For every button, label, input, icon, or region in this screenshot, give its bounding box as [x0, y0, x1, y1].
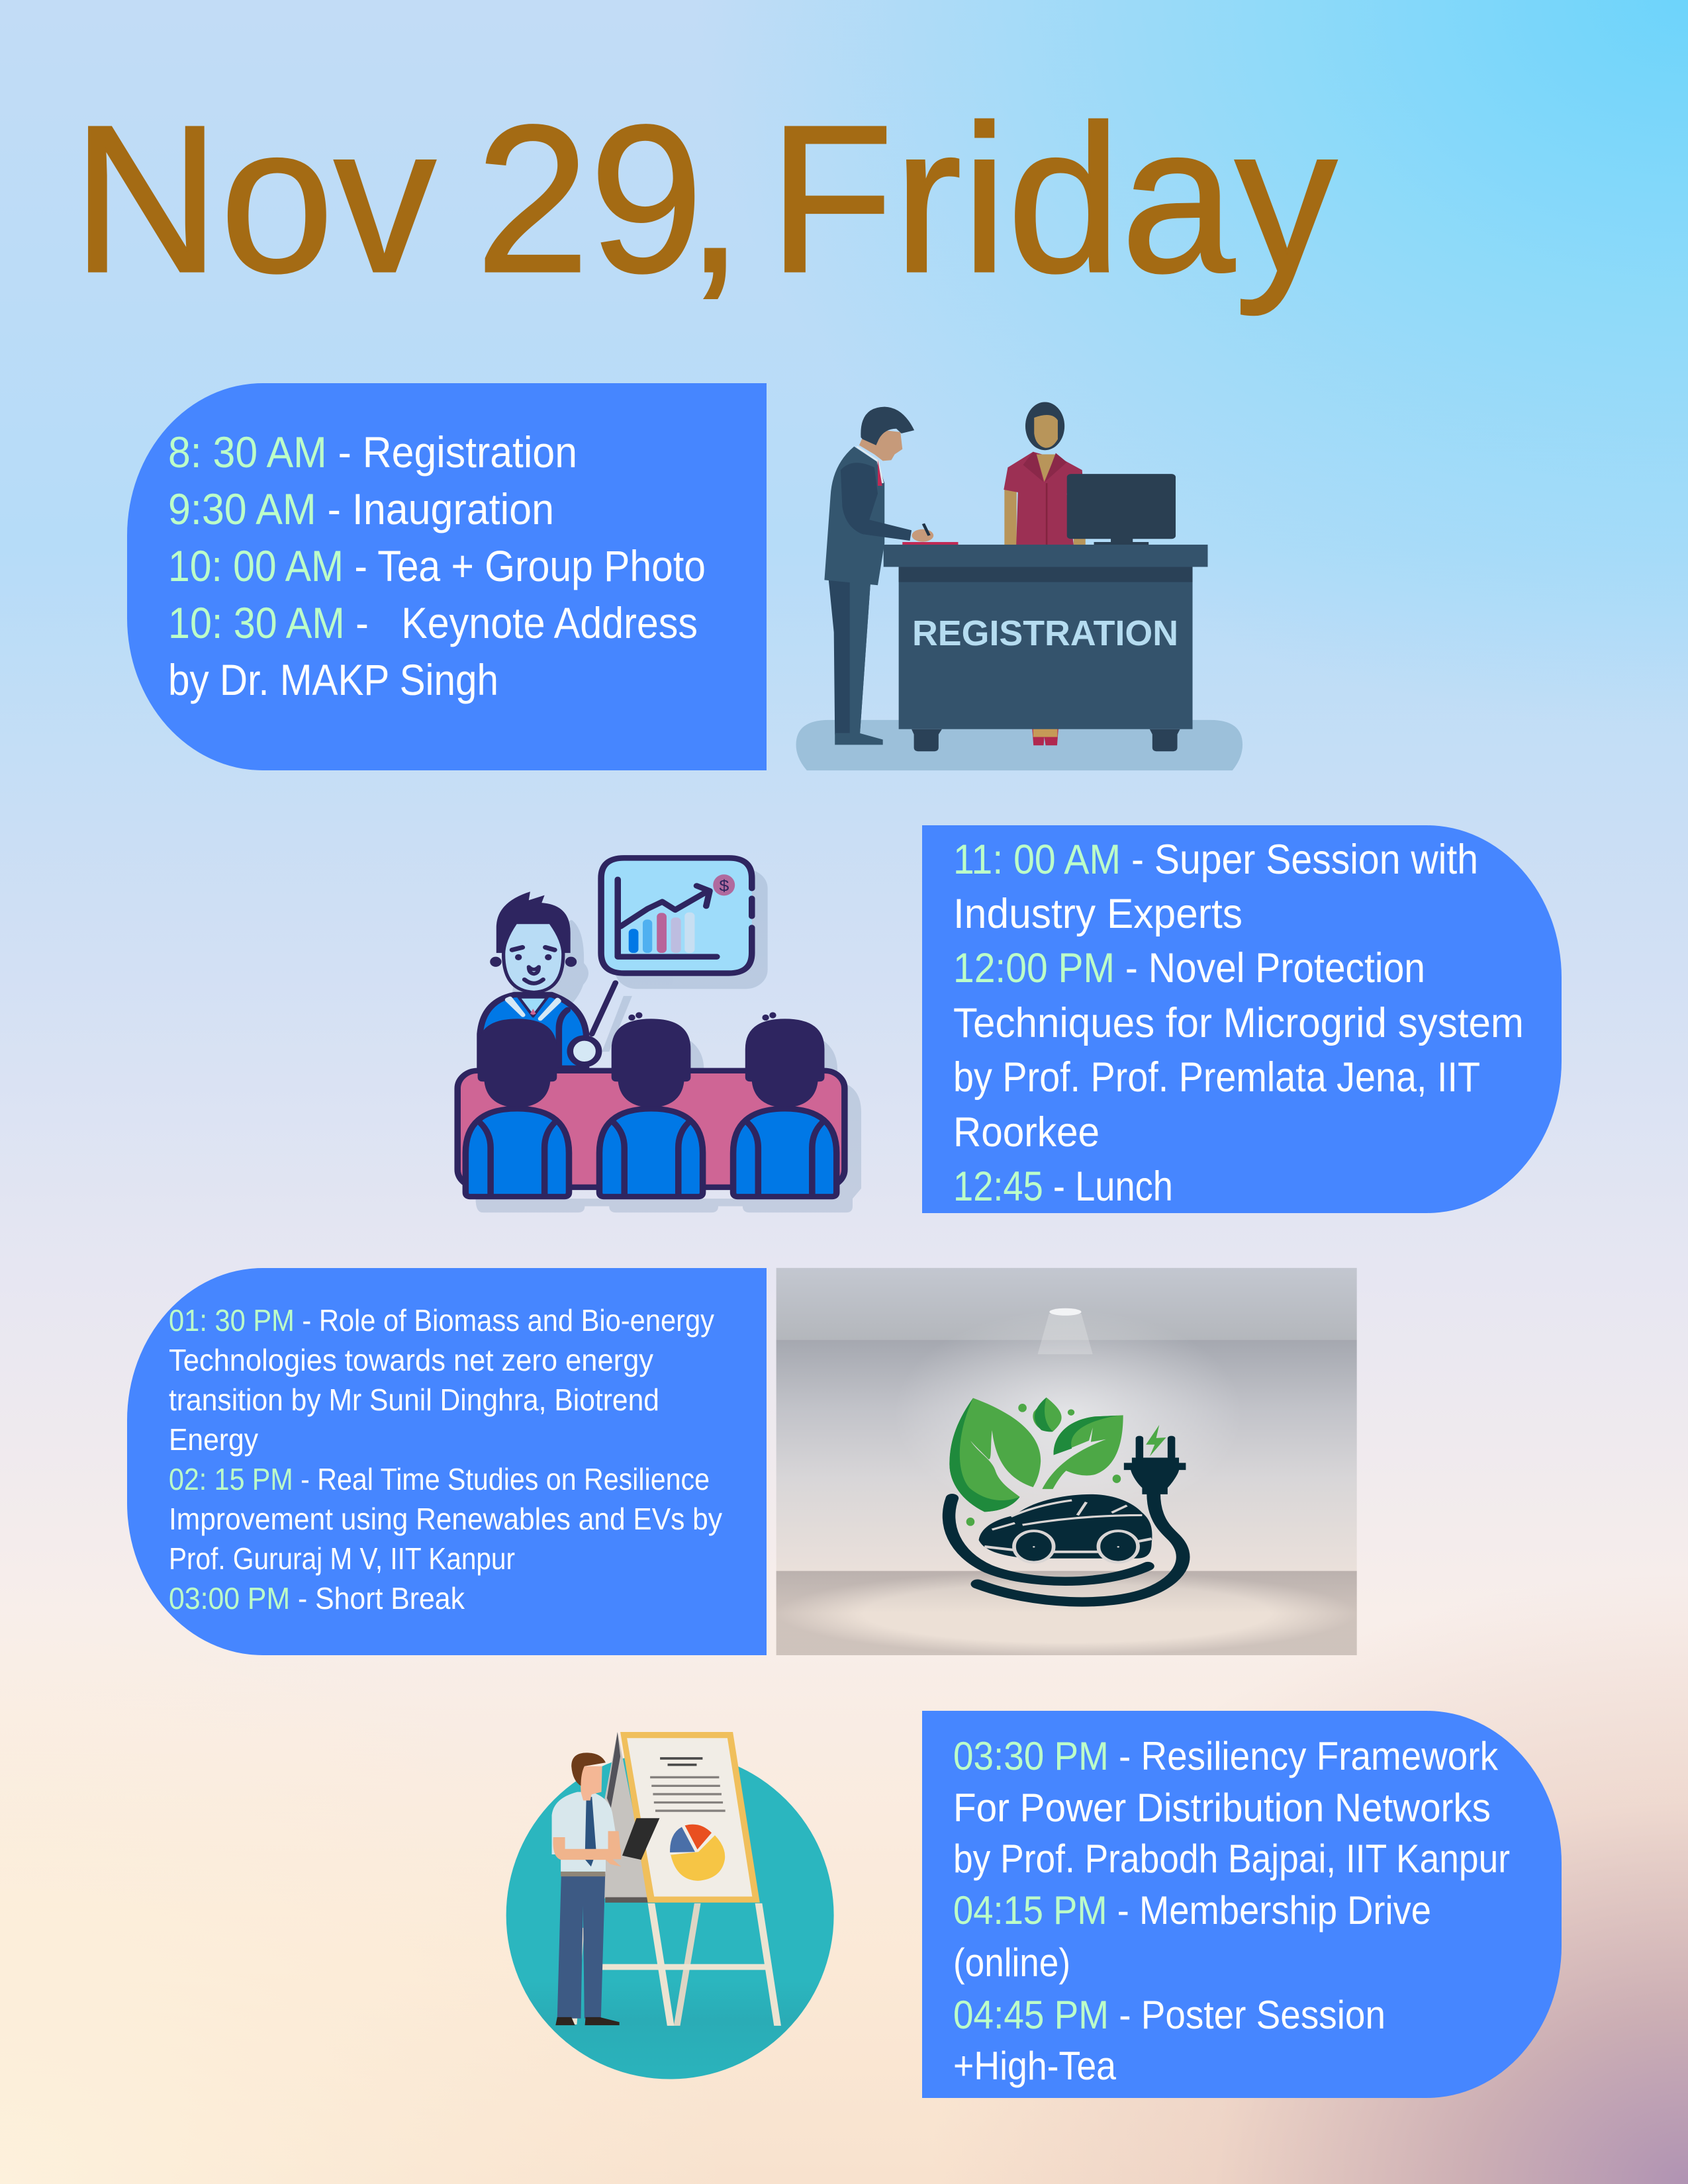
table: [457, 1071, 845, 1187]
illustration: presenter at easel: [506, 1732, 834, 2079]
image: EV and leaf logo on wall: [776, 1268, 1357, 1655]
panel: midday sessions: by Prof. Prof. Premlata Jena, IIT: [953, 1054, 1480, 1101]
panel: midday sessions: Roorkee: [953, 1109, 1100, 1156]
wall lamp: [1038, 1308, 1093, 1354]
panel: midday sessions: Industry Experts: [953, 891, 1243, 937]
panel: late afternoon sessions: +High-Tea: [953, 2044, 1117, 2088]
title: Friday: [769, 82, 1337, 317]
panel: morning registration schedule: 9:30 AM - Inaugration: [168, 484, 554, 533]
teal circle: [506, 1752, 834, 2079]
panel: afternoon talks: 01: 30 PM - Role of Biomass and Bio-energy: [169, 1303, 714, 1338]
panel: late afternoon sessions: by Prof. Prabodh Bajpai, IIT Kanpur: [953, 1837, 1510, 1881]
pointer: [592, 983, 616, 1034]
desk: [1032, 728, 1058, 745]
pie chart: [670, 1825, 725, 1881]
panel: morning registration schedule: [127, 383, 767, 770]
easel back: [603, 1732, 651, 1899]
title: ,: [686, 82, 743, 316]
man with tablet: [552, 1752, 659, 2025]
chart board: [601, 858, 752, 973]
title: 29: [476, 82, 703, 316]
panel: midday sessions: Techniques for Microgrid system: [953, 1000, 1524, 1046]
easel board: [620, 1732, 760, 1903]
panel: late afternoon sessions: 04:15 PM - Membership Drive: [953, 1888, 1431, 1933]
audience member two: [599, 1012, 703, 1197]
board text lines: [660, 1758, 702, 1765]
illustration: presenter with audience: [457, 858, 861, 1212]
panel: afternoon talks: Improvement using Renewables and EVs by: [169, 1502, 722, 1536]
leaves: [949, 1398, 1123, 1526]
panel: midday sessions: 11: 00 AM - Super Session with: [953, 837, 1478, 883]
illustration: registration desk: [796, 402, 1243, 770]
receptionist: [1004, 402, 1086, 545]
panel: late afternoon sessions: 03:30 PM - Resiliency Framework: [953, 1734, 1499, 1778]
monitor: [1094, 542, 1149, 545]
floor shadow: [796, 720, 1243, 770]
panel: morning registration schedule: 10: 30 AM - Keynote Address: [168, 598, 698, 647]
man signing in: [824, 407, 958, 745]
panel: late afternoon sessions: 04:45 PM - Poster Session: [953, 1993, 1385, 2037]
soft shadows: [476, 870, 861, 1212]
panel: afternoon talks: 02: 15 PM - Real Time Studies on Resilience: [169, 1462, 710, 1496]
panel: afternoon talks: Technologies towards net zero energy: [169, 1343, 653, 1377]
panel: midday sessions: 12:00 PM - Novel Protection: [953, 945, 1425, 991]
desk label: REGISTRATION: [912, 614, 1178, 653]
title: Nov: [72, 82, 436, 316]
panel: late afternoon sessions: [922, 1711, 1562, 2098]
car: [979, 1494, 1152, 1563]
panel: morning registration schedule: by Dr. MAKP Singh: [168, 655, 498, 704]
panel: midday sessions: 12:45 - Lunch: [953, 1163, 1173, 1210]
panel: late afternoon sessions: (online): [953, 1940, 1070, 1985]
panel: afternoon talks: [127, 1268, 767, 1655]
plug and cable: [949, 1425, 1186, 1602]
chart board: $: [719, 878, 729, 895]
panel: midday sessions: [922, 825, 1562, 1213]
presenter: [480, 891, 586, 1068]
panel: morning registration schedule: 8: 30 AM - Registration: [168, 428, 577, 477]
audience member one: [465, 1019, 569, 1197]
panel: afternoon talks: Energy: [169, 1422, 258, 1457]
panel: afternoon talks: Prof. Gururaj M V, IIT Kanpur: [169, 1541, 515, 1576]
panel: late afternoon sessions: For Power Distribution Networks: [953, 1786, 1491, 1830]
audience member three: [733, 1012, 837, 1197]
panel: afternoon talks: transition by Mr Sunil Dinghra, Biotrend: [169, 1383, 659, 1417]
panel: morning registration schedule: 10: 00 AM - Tea + Group Photo: [168, 541, 706, 590]
panel: afternoon talks: 03:00 PM - Short Break: [169, 1581, 465, 1615]
easel legs: [570, 1903, 781, 2026]
